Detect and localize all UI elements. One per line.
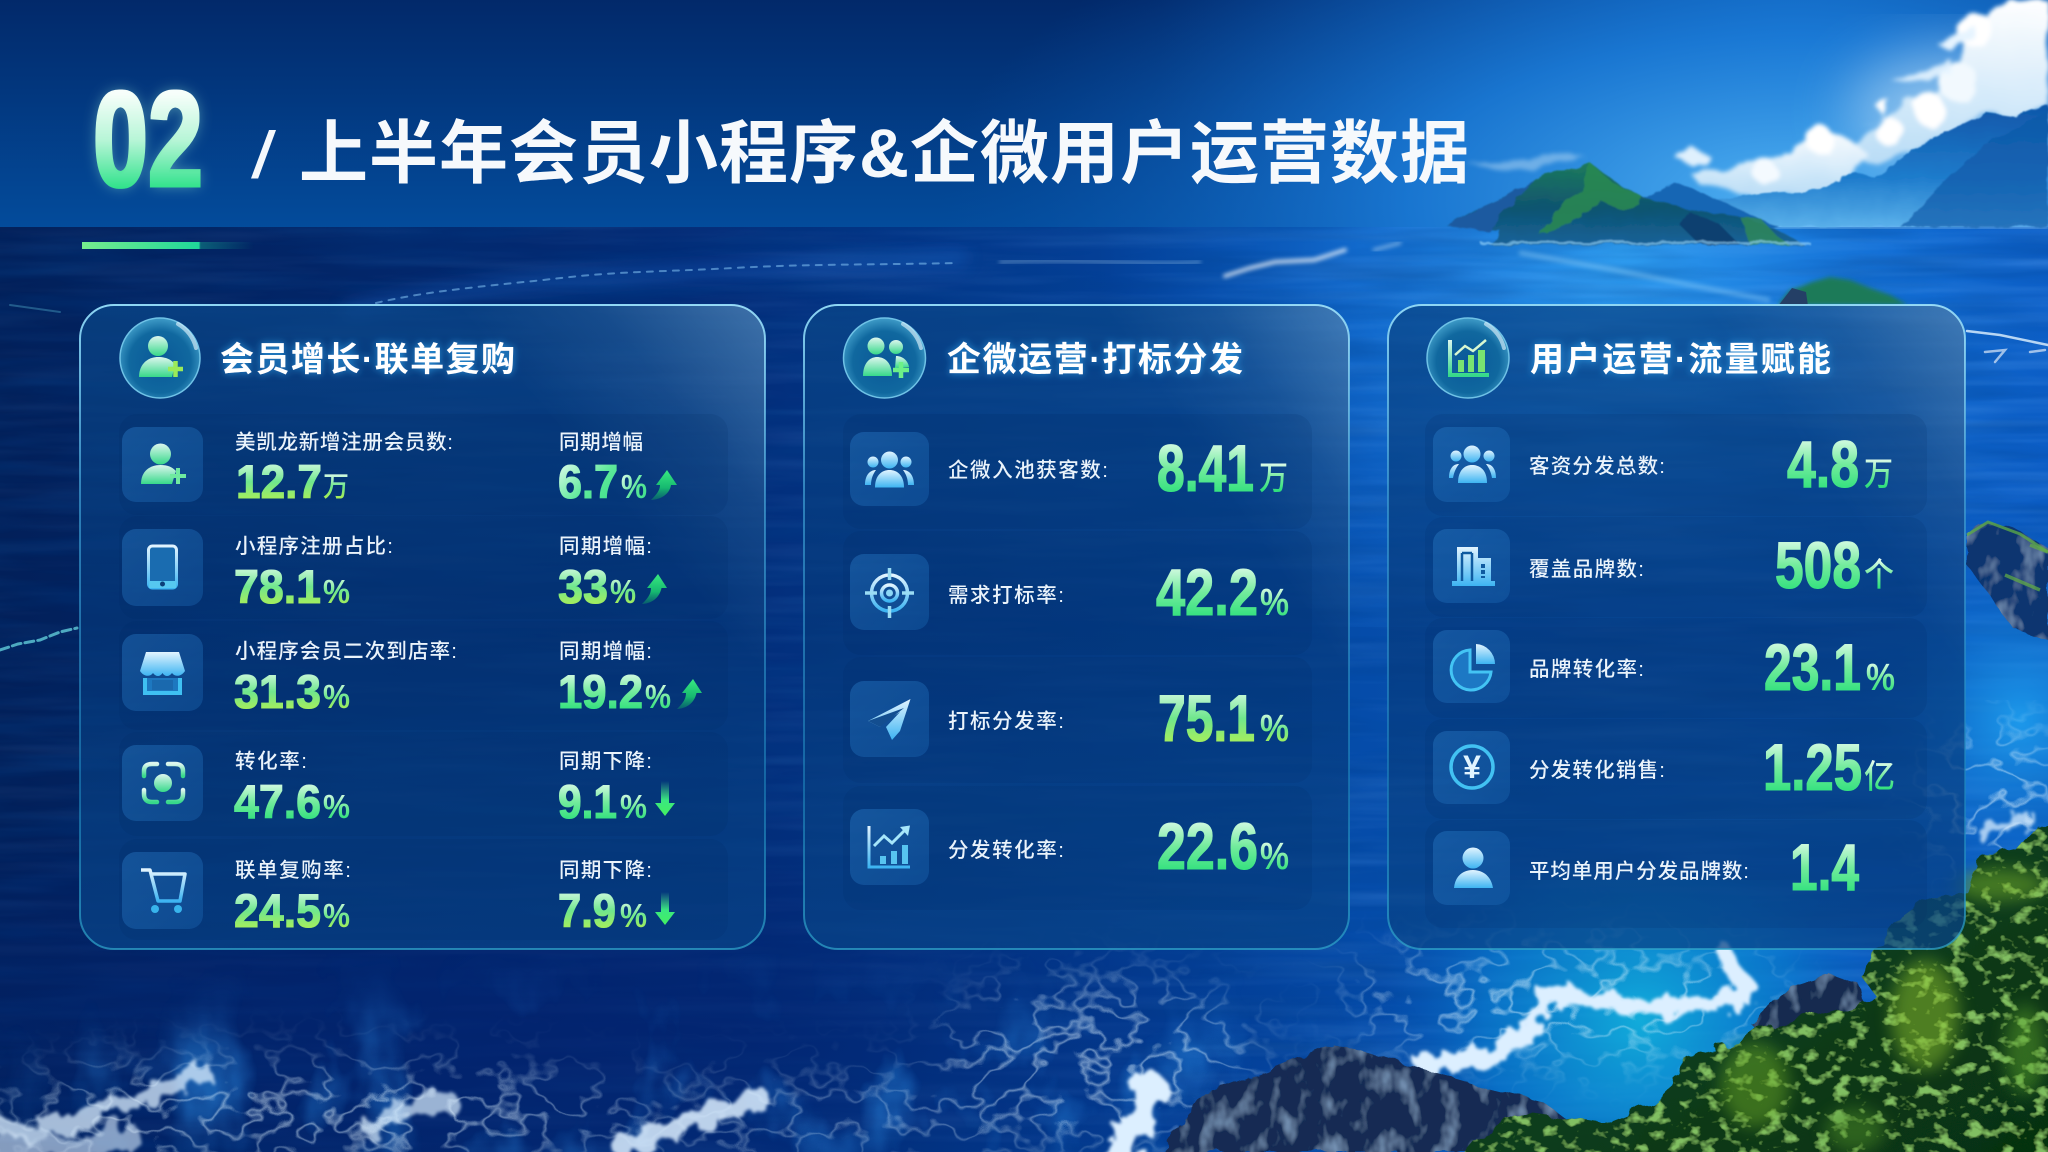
icon: yen coin	[1433, 731, 1510, 804]
foliage	[1450, 810, 2048, 1152]
label: 分发转化率:	[948, 839, 1064, 862]
change value: %	[645, 678, 671, 715]
cloud glow	[1850, 50, 2048, 170]
value: 4.8	[1787, 427, 1859, 501]
label: 客资分发总数:	[1529, 455, 1665, 478]
panel: 用户运营·流量赋能	[1388, 305, 1965, 949]
arrow: down	[655, 892, 675, 925]
row: 品牌转化率	[1425, 618, 1927, 718]
icon: buildings	[1433, 529, 1510, 603]
value: %	[323, 678, 350, 715]
label: 打标分发率:	[948, 710, 1064, 733]
arrow: up	[642, 574, 667, 604]
row: 联单复购率	[119, 839, 728, 940]
panel 3 icon badge: chart	[1427, 318, 1509, 398]
row: 分发转化销售	[1425, 719, 1927, 819]
value: 23.1	[1764, 630, 1861, 704]
row: 分发转化率	[843, 786, 1312, 910]
row: 小程序会员二次到店率	[119, 621, 728, 730]
value: %	[1260, 582, 1289, 624]
value: %	[1866, 657, 1895, 699]
value: 万	[1259, 459, 1288, 496]
label: 联单复购率:	[235, 859, 351, 882]
value: 12.7	[236, 455, 322, 508]
row: 企微入池获客数	[843, 414, 1312, 529]
row: 需求打标率	[843, 531, 1312, 655]
right side reef	[1967, 521, 2048, 640]
change value: 33	[558, 560, 608, 613]
label: 品牌转化率:	[1529, 658, 1644, 681]
value: 75.1	[1158, 681, 1255, 755]
row: 客资分发总数	[1425, 414, 1927, 516]
label: 平均单用户分发品牌数:	[1529, 860, 1749, 883]
icon: people	[1433, 427, 1510, 502]
panel: 会员增长·联单复购	[80, 305, 765, 949]
panel 1 heading: 会员增长·联单复购	[220, 341, 515, 379]
value: %	[323, 897, 350, 934]
row: 美凯龙新增注册会员数	[119, 414, 728, 515]
row: 打标分发率	[843, 657, 1312, 783]
row: 覆盖品牌数	[1425, 517, 1927, 617]
change value: %	[620, 897, 647, 934]
change value: 9.1	[558, 775, 617, 828]
icon: paper plane	[850, 681, 929, 757]
row: 转化率	[119, 732, 728, 836]
panel 2 heading: 企微运营·打标分发	[947, 341, 1243, 379]
change value	[558, 560, 636, 613]
title slash: /	[251, 118, 277, 192]
icon: store	[122, 634, 203, 711]
shore rock	[1162, 1043, 1610, 1152]
icon: pie chart	[1433, 630, 1510, 703]
label: 企微入池获客数:	[948, 459, 1108, 482]
panel 1 icon badge: user plus	[120, 318, 200, 398]
value: 508	[1775, 528, 1861, 602]
label: 小程序注册占比:	[235, 535, 393, 558]
icon: scan face	[122, 745, 203, 821]
row: 小程序注册占比	[119, 516, 728, 619]
clouds	[1468, 0, 2048, 197]
icon: target	[850, 554, 929, 630]
label: 美凯龙新增注册会员数:	[235, 431, 453, 454]
icon: user plus	[122, 427, 203, 502]
arrow: down	[655, 781, 675, 816]
value: %	[323, 788, 350, 825]
icon: growth chart	[850, 809, 929, 885]
value: 8.41	[1157, 431, 1254, 505]
title underline	[82, 242, 254, 249]
island	[1447, 163, 1810, 245]
label: 小程序会员二次到店率:	[235, 640, 457, 663]
section number 02: 02	[93, 63, 203, 215]
value: 亿	[1864, 758, 1895, 795]
change value: %	[621, 468, 647, 505]
change value: 19.2	[558, 665, 643, 718]
label: 转化率:	[235, 750, 307, 773]
value: 1.4	[1790, 830, 1859, 904]
value: %	[323, 573, 350, 610]
label: 覆盖品牌数:	[1529, 558, 1644, 581]
value: 31.3	[234, 665, 321, 718]
value: %	[1260, 836, 1289, 878]
arrow: up	[651, 470, 677, 500]
value: 22.6	[1157, 809, 1258, 883]
change label: 同期增幅:	[559, 535, 652, 558]
change value: %	[610, 573, 636, 610]
icon: shopping cart	[122, 852, 203, 929]
change value: %	[620, 788, 647, 825]
change value: 6.7	[558, 455, 618, 508]
foam network	[0, 700, 2048, 1152]
value: 万	[323, 471, 349, 502]
change label: 同期下降:	[559, 859, 652, 882]
icon: yen coin: ¥	[1463, 749, 1481, 785]
panel: 企微运营·打标分发	[804, 305, 1349, 949]
icon: phone	[122, 529, 203, 606]
value: 78.1	[234, 560, 321, 613]
value: 1.25	[1763, 730, 1862, 804]
panel 2 icon badge: group plus	[844, 318, 926, 398]
title: 上半年会员小程序&企微用户运营数据	[299, 115, 1469, 192]
change label: 同期增幅	[559, 431, 643, 454]
panel 3 heading: 用户运营·流量赋能	[1530, 341, 1831, 379]
value: %	[1260, 708, 1289, 750]
value: 42.2	[1156, 555, 1258, 629]
foam crests	[0, 815, 2030, 1152]
foliage highlights	[1721, 869, 2045, 1152]
icon: people	[850, 432, 929, 506]
value: 万	[1864, 455, 1893, 492]
value: 个	[1864, 556, 1894, 593]
change value: 7.9	[558, 884, 616, 937]
value: 47.6	[234, 775, 321, 828]
row: 平均单用户分发品牌数	[1425, 820, 1927, 928]
change label: 同期增幅:	[559, 640, 652, 663]
label: 分发转化销售:	[1529, 759, 1665, 782]
arrow: up	[677, 679, 702, 709]
small island	[1778, 277, 1908, 305]
icon: person	[1433, 831, 1510, 905]
horizon glow	[1770, 225, 2048, 228]
sparkling wave lines	[0, 243, 2048, 650]
label: 需求打标率:	[948, 584, 1064, 607]
value: 24.5	[234, 884, 321, 937]
change label: 同期下降:	[559, 750, 652, 773]
far mountains	[1644, 105, 2048, 227]
